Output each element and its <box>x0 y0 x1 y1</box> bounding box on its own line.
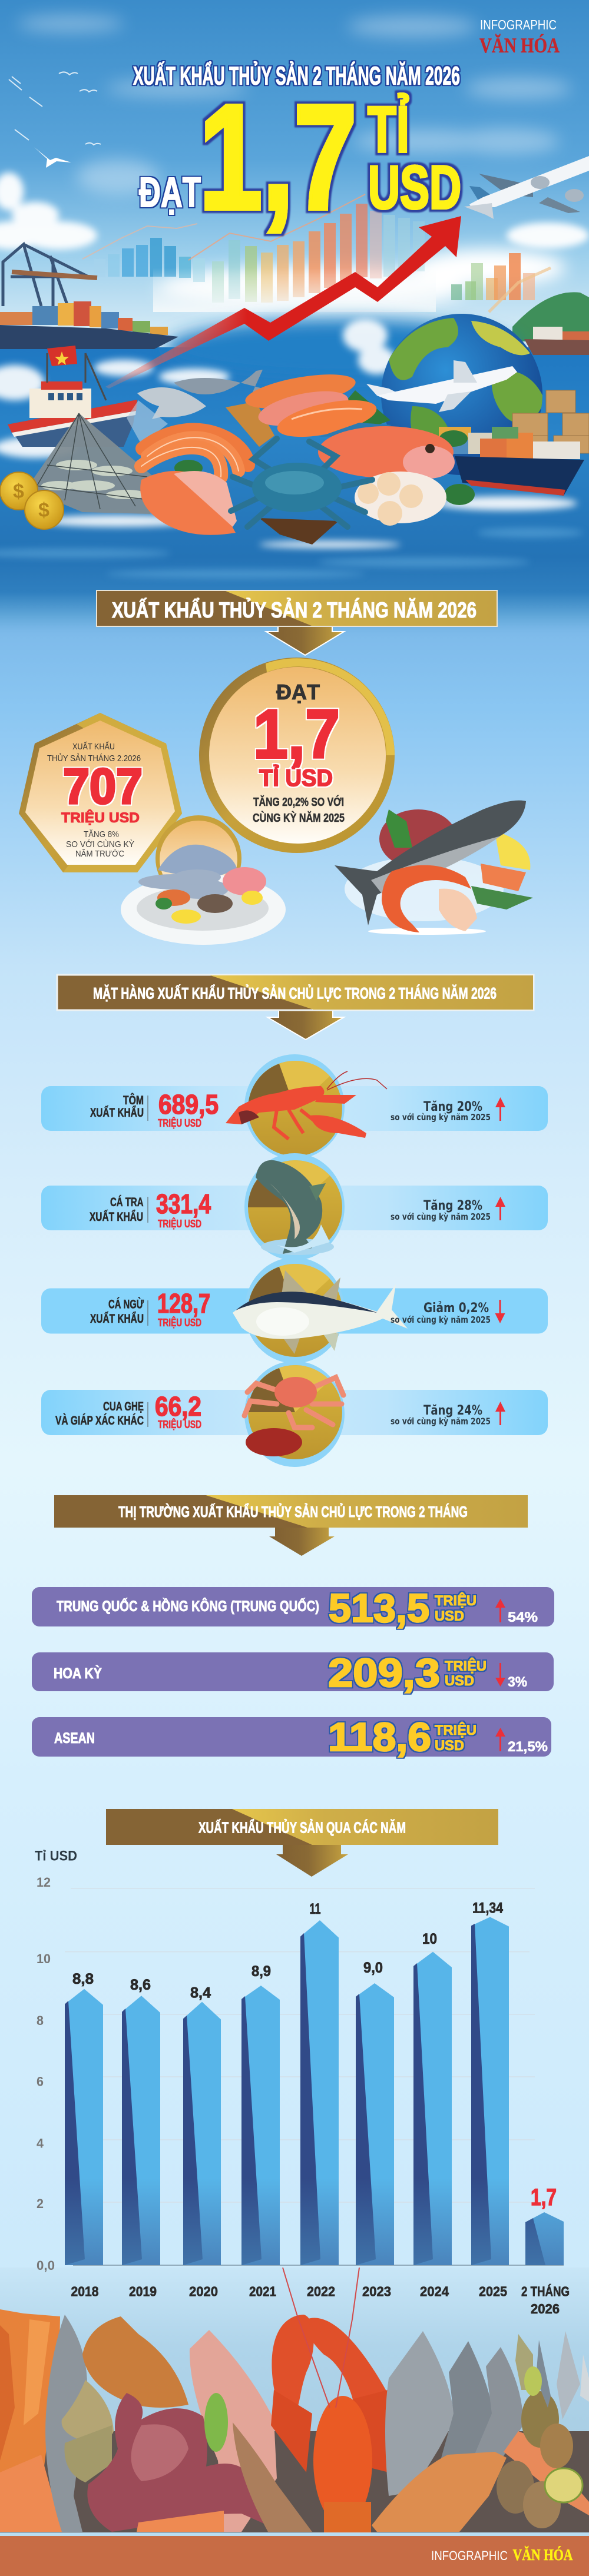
label <box>90 1093 144 1120</box>
fade under bars <box>153 268 436 312</box>
foam <box>0 319 577 548</box>
x axis labels: 2022 <box>307 2284 335 2299</box>
icon: crabs <box>244 1377 343 1456</box>
x axis labels: 2025 <box>479 2284 507 2299</box>
market: ASEAN: TRIỆU <box>435 1722 477 1738</box>
market: USA: 209,3 <box>328 1651 440 1695</box>
bar 2021 <box>241 1986 280 2265</box>
banner: overview: XUẤT KHẨU THỦY SẢN 2 THÁNG NĂM 2026 <box>112 597 477 622</box>
cargo ship <box>439 427 584 496</box>
market: China and Hong Kong: TRIỆU <box>435 1592 477 1609</box>
blue crab <box>231 439 372 527</box>
banner: key products <box>57 975 534 1040</box>
label: CÁ NGỪ <box>108 1297 144 1312</box>
bar values: 8,6 <box>130 1977 151 1993</box>
ice background <box>0 2283 589 2431</box>
value: TRIỆU USD <box>158 1217 201 1230</box>
bar 2025 <box>471 1917 509 2265</box>
seafood photo strip <box>0 2268 589 2534</box>
value: 128,7 <box>157 1288 210 1319</box>
change: so với cùng kỳ năm 2025 <box>391 1314 491 1325</box>
label <box>90 1196 144 1224</box>
value <box>157 1288 210 1329</box>
y axis labels: 8 <box>37 2013 44 2028</box>
red fish <box>318 423 455 479</box>
February export badge: TRIỆU USD <box>61 809 140 826</box>
value: 689,5 <box>158 1089 219 1120</box>
y axis labels: 10 <box>37 1951 51 1966</box>
leaves <box>174 390 475 505</box>
banner: markets <box>54 1495 528 1556</box>
icon: jumping fish <box>256 1160 334 1255</box>
grey fish <box>45 2315 87 2532</box>
fishing net <box>27 400 168 514</box>
label: XUẤT KHẨU <box>90 1210 143 1224</box>
market: China and Hong Kong: 513,5 <box>329 1586 429 1631</box>
market: ASEAN: 118,6 <box>328 1715 431 1760</box>
value <box>158 1089 219 1129</box>
headline figure <box>139 74 461 240</box>
oysters <box>62 2380 114 2482</box>
x axis labels: 2 THÁNG <box>521 2283 570 2299</box>
x axis labels <box>71 2283 570 2316</box>
seafood pile <box>140 368 475 545</box>
globe <box>381 314 545 475</box>
value: 66,2 <box>155 1391 201 1422</box>
port cranes <box>3 244 97 306</box>
total export badge: 1,7 <box>253 695 340 772</box>
footer <box>0 2532 589 2576</box>
y axis labels: 4 <box>37 2136 44 2151</box>
total export badge: TỈ USD <box>259 764 333 791</box>
total export badge <box>199 658 395 853</box>
y axis labels: 6 <box>37 2074 44 2089</box>
x axis labels: 2019 <box>129 2284 157 2299</box>
headline figure: ĐẠT <box>139 170 201 216</box>
label: XUẤT KHẨU <box>90 1312 144 1326</box>
headline figure: USD <box>368 154 461 222</box>
market: ASEAN: 21,5% <box>508 1739 548 1755</box>
bar 2019 <box>122 1996 160 2265</box>
flag of Vietnam <box>47 346 77 366</box>
bar values: 8,8 <box>72 1971 94 1987</box>
total export badge: TĂNG 20,2% SO VỚI <box>253 795 344 809</box>
total export badge: CÙNG KỲ NĂM 2025 <box>253 811 345 825</box>
change: Tăng 28% <box>423 1199 482 1213</box>
x axis labels: 2024 <box>420 2284 449 2299</box>
February export badge: NĂM TRƯỚC <box>75 849 124 859</box>
bar 2023 <box>356 1983 394 2265</box>
banner: markets: THỊ TRƯỜNG XUẤT KHẨU THỦY SẢN CHỦ LỰC TRONG 2 THÁNG <box>118 1502 468 1521</box>
clouds <box>0 15 589 311</box>
market: ASEAN <box>32 1715 551 1760</box>
icon: tuna <box>233 1270 408 1354</box>
market: China and Hong Kong: TRUNG QUỐC & HỒNG KÔNG (TRUNG QUỐC) <box>57 1597 319 1615</box>
bar values <box>72 1900 557 2210</box>
gold coins: $ <box>38 499 49 522</box>
bar values: 10 <box>422 1931 437 1947</box>
trend lines <box>82 194 551 312</box>
shrimp <box>141 430 248 477</box>
total export badge: ĐẠT <box>276 680 320 704</box>
footer: VĂN HÓA <box>512 2546 573 2564</box>
lobster <box>271 2315 389 2534</box>
row: crab <box>41 1361 548 1467</box>
salmon right <box>504 2431 589 2515</box>
sea <box>0 347 589 639</box>
y axis labels: 2 <box>37 2196 44 2211</box>
change <box>391 1199 491 1222</box>
February export badge: THỦY SẢN THÁNG 2.2026 <box>47 753 141 763</box>
silver fish <box>385 2331 523 2496</box>
red arrow <box>105 216 461 389</box>
plane top right <box>464 156 589 219</box>
value <box>156 1189 211 1230</box>
bar values: 8,9 <box>252 1963 271 1980</box>
waves <box>0 528 583 578</box>
headline figure: 1,7 <box>199 74 357 240</box>
change <box>391 1403 491 1427</box>
headline figure: TỈ <box>368 94 409 166</box>
gold coins: $ <box>13 480 24 503</box>
change: Giảm 0,2% <box>423 1301 489 1316</box>
change: so với cùng kỳ năm 2025 <box>391 1416 491 1427</box>
x axis labels: 2021 <box>249 2284 276 2299</box>
brown prawn <box>233 2422 312 2532</box>
market: USA: 3% <box>508 1674 527 1690</box>
change <box>391 1100 491 1123</box>
pink fish <box>190 2330 277 2532</box>
value: TRIỆU USD <box>158 1316 201 1329</box>
plane over globe <box>366 360 517 412</box>
salmon mid bottom <box>137 2511 224 2532</box>
label: TÔM <box>123 1093 144 1107</box>
market: USA: USD <box>445 1673 474 1689</box>
cargo boxes <box>512 390 589 453</box>
market: USA: TRIỆU <box>445 1658 487 1674</box>
market: USA <box>32 1651 554 1695</box>
value: 331,4 <box>156 1189 211 1219</box>
market: ASEAN: USD <box>435 1738 464 1754</box>
wooden board <box>226 401 274 447</box>
prawns <box>372 2452 507 2532</box>
x axis labels: 2026 <box>531 2301 560 2316</box>
hills <box>512 292 589 341</box>
bar values: 11,34 <box>472 1900 503 1917</box>
label: CÁ TRA <box>110 1196 144 1209</box>
row: pangasius <box>41 1153 548 1260</box>
salmon steak <box>140 471 237 535</box>
February export badge: SO VỚI CÙNG KỲ <box>66 839 134 849</box>
x axis labels: 2018 <box>71 2284 99 2299</box>
bar 2018 <box>65 1989 103 2265</box>
gold coins <box>0 472 64 529</box>
octopus <box>87 2393 268 2532</box>
label: CUA GHẸ <box>103 1400 144 1413</box>
market: China and Hong Kong: USD <box>435 1608 464 1624</box>
row: shrimp <box>41 1054 548 1159</box>
logo top: VĂN HÓA <box>479 34 560 57</box>
February export badge: TĂNG 8% <box>84 829 119 839</box>
bar values: 8,4 <box>190 1985 211 2001</box>
lobster antennae <box>283 2268 359 2408</box>
market: China and Hong Kong <box>32 1586 554 1631</box>
arrow up <box>495 1097 505 1121</box>
container ship <box>0 301 178 349</box>
crab <box>82 2316 188 2408</box>
y axis labels: 0,0 <box>37 2258 55 2273</box>
banner: yearly exports: XUẤT KHẨU THỦY SẢN QUA CÁC NĂM <box>198 1818 406 1837</box>
seagull <box>34 147 71 168</box>
icon: crayfish <box>226 1071 387 1139</box>
bar values: 11 <box>310 1901 321 1917</box>
lime <box>545 2468 583 2502</box>
scallops <box>355 472 446 526</box>
change <box>391 1301 491 1325</box>
bar values: 9,0 <box>363 1960 383 1976</box>
hero illustration <box>0 0 589 639</box>
sky <box>0 0 589 353</box>
footer: INFOGRAPHIC <box>431 2548 508 2563</box>
parsley <box>204 2393 228 2452</box>
value: TRIỆU USD <box>158 1418 201 1430</box>
banner: overview <box>97 590 497 655</box>
fish and shrimp group <box>335 801 533 935</box>
label <box>90 1297 144 1326</box>
value: TRIỆU USD <box>158 1117 201 1129</box>
shellfish and right fish <box>497 2331 589 2528</box>
change: so với cùng kỳ năm 2025 <box>391 1211 491 1222</box>
logo top: INFOGRAPHIC <box>480 17 557 32</box>
logo top <box>479 17 560 57</box>
arrow up <box>495 1197 505 1220</box>
distant ship <box>524 327 589 355</box>
seafood plate <box>121 815 286 945</box>
change: Tăng 24% <box>423 1403 482 1418</box>
market: ASEAN: ASEAN <box>54 1730 95 1747</box>
y axis labels <box>37 1875 55 2273</box>
axis unit: Tỉ USD <box>35 1848 77 1864</box>
February export badge <box>19 713 182 872</box>
x axis labels: 2023 <box>362 2284 391 2299</box>
February export badge: 707 <box>63 758 143 814</box>
bar chart: exports by year <box>35 1848 570 2316</box>
x axis labels: 2020 <box>189 2284 218 2299</box>
salmon fillets <box>243 368 380 444</box>
label: XUẤT KHẨU <box>90 1106 144 1120</box>
change: so với cùng kỳ năm 2025 <box>391 1112 491 1123</box>
arrow down <box>495 1300 505 1323</box>
shrimps left <box>0 2309 60 2490</box>
banner: yearly exports <box>106 1809 498 1877</box>
bar 2020 <box>183 2002 221 2265</box>
arrow up <box>495 1402 505 1425</box>
change: Tăng 20% <box>423 1100 482 1114</box>
growth bar chart <box>94 204 535 303</box>
bar 2 months 2026 <box>525 2212 564 2265</box>
page background <box>0 589 589 2576</box>
label: VÀ GIÁP XÁC KHÁC <box>55 1414 144 1428</box>
bar 2024 <box>413 1952 452 2265</box>
market: USA: HOA KỲ <box>54 1664 102 1682</box>
row: tuna <box>41 1257 548 1363</box>
birds <box>9 72 101 145</box>
label <box>55 1400 144 1428</box>
February export badge: XUẤT KHẨU <box>72 741 115 752</box>
grey fish <box>137 370 263 419</box>
salmon left bottom <box>0 2455 68 2532</box>
dark backing <box>0 2431 589 2532</box>
bar 2022 <box>300 1920 339 2265</box>
bar values: 1,7 <box>531 2185 557 2210</box>
y axis labels: 12 <box>37 1875 51 1890</box>
market: China and Hong Kong: 54% <box>508 1609 538 1625</box>
fishing boat <box>8 353 137 447</box>
